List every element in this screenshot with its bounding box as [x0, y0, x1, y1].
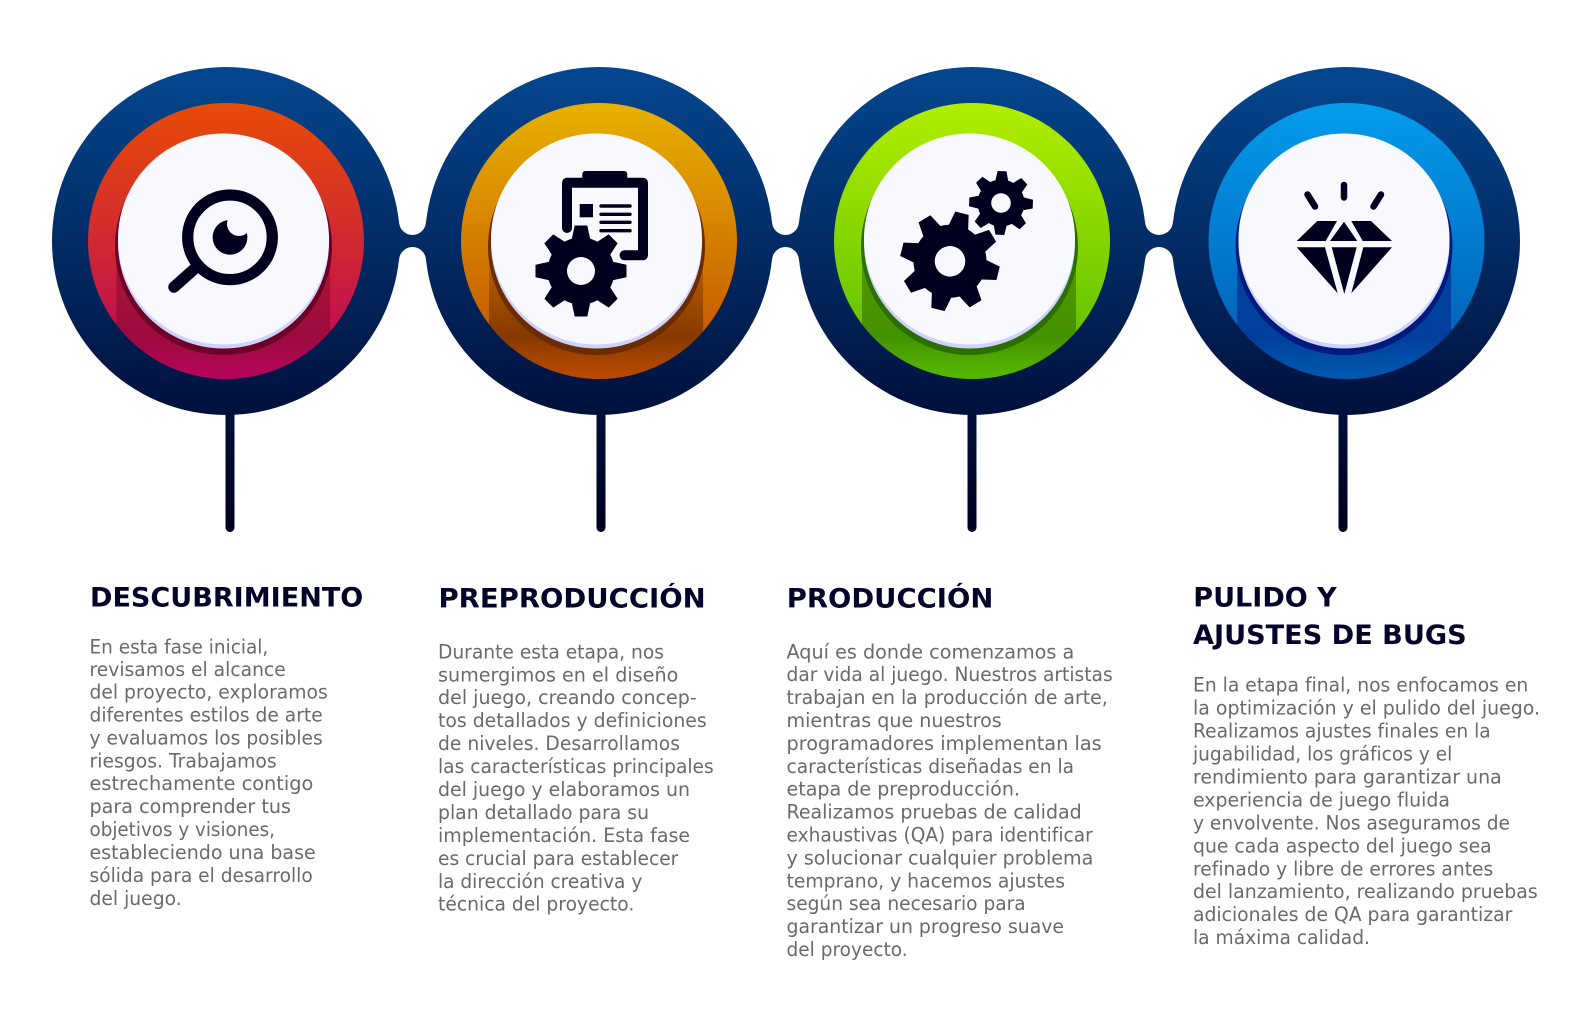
connector: circle 1 to circle 2 [395, 222, 430, 260]
icon: clipboard with gear [536, 171, 643, 316]
text column 1: descubrimiento [90, 583, 363, 910]
body text: produccion: dar vida al juego. Nuestros artistas [786, 663, 1113, 686]
body text: pulido y ajustes de bugs: del lanzamiento, realizando pruebas [1193, 880, 1538, 903]
stage 3 badge: produccion [798, 67, 1146, 532]
body text: pulido y ajustes de bugs: En la etapa final, nos enfocamos en [1193, 674, 1528, 697]
body text: produccion [786, 640, 1113, 961]
body text: produccion: exhaustivas (QA) para identificar [786, 824, 1094, 846]
icon: magnifier with eye [174, 195, 272, 287]
body text: pulido y ajustes de bugs: rendimiento para garantizar una [1193, 766, 1502, 788]
body text: descubrimiento: diferentes estilos de arte [90, 704, 323, 726]
text column 2: preproduccion [438, 583, 714, 916]
heading: produccion: PRODUCCIÓN [787, 583, 993, 615]
heading: pulido y ajustes de bugs: AJUSTES DE BUGS [1193, 620, 1467, 651]
body text: produccion: Realizamos pruebas de calidad [786, 801, 1082, 824]
body text: produccion: temprano, y hacemos ajustes [786, 869, 1065, 892]
icon: diamond with sparkle [1297, 185, 1392, 294]
body text: pulido y ajustes de bugs [1192, 674, 1540, 949]
connector: circle 2 to circle 3 [768, 222, 803, 260]
body text: produccion: programadores implementan las [786, 732, 1102, 755]
heading: preproduccion: PREPRODUCCIÓN [438, 583, 706, 615]
body text: descubrimiento: estableciendo una base [90, 841, 316, 864]
body text: descubrimiento: riesgos. Trabajamos [90, 749, 277, 772]
body text: preproduccion: tos detallados y definiciones [438, 709, 707, 732]
heading: pulido y ajustes de bugs [1193, 583, 1467, 651]
body text: preproduccion: plan detallado para su [438, 801, 649, 824]
body text: pulido y ajustes de bugs: la optimización y el pulido del juego. [1193, 697, 1540, 720]
body text: pulido y ajustes de bugs: la máxima calidad. [1193, 926, 1370, 949]
body text: preproduccion: las características principales [438, 755, 714, 778]
body text: produccion: mientras que nuestros [786, 709, 1002, 732]
body text: descubrimiento [90, 635, 328, 910]
text column 3: produccion [786, 583, 1113, 961]
stage 4 badge: pulido y ajustes [1172, 67, 1520, 532]
connector: circle 3 to circle 4 [1141, 221, 1177, 261]
body text: descubrimiento: del proyecto, exploramos [90, 681, 328, 704]
text column 4: pulido y ajustes de bugs [1192, 583, 1540, 949]
body text: pulido y ajustes de bugs: jugabilidad, los gráficos y el [1192, 742, 1452, 766]
body text: descubrimiento: En esta fase inicial, [90, 635, 268, 658]
body text: preproduccion: implementación. Esta fase [438, 824, 690, 847]
body text: descubrimiento: sólida para el desarrollo [90, 864, 313, 887]
body text: preproduccion: es crucial para establecer [438, 847, 679, 870]
body text: preproduccion: de niveles. Desarrollamos [438, 732, 680, 755]
body text: pulido y ajustes de bugs: y envolvente. Nos aseguramos de [1193, 811, 1510, 834]
body text: descubrimiento: objetivos y visiones, [90, 818, 275, 841]
body text: preproduccion: la dirección creativa y [438, 870, 643, 893]
body text: pulido y ajustes de bugs: experiencia de juego fluida [1193, 788, 1450, 811]
body text: pulido y ajustes de bugs: refinado y libre de errores antes [1193, 857, 1493, 880]
icon: two gears [890, 170, 1034, 321]
heading: descubrimiento: DESCUBRIMIENTO [90, 583, 363, 614]
body text: produccion: Aquí es donde comenzamos a [786, 640, 1074, 663]
body text: descubrimiento: del juego. [90, 887, 182, 910]
body text: descubrimiento: estrechamente contigo [90, 772, 313, 795]
stage 1 badge: descubrimiento [52, 67, 400, 532]
body text: produccion: garantizar un progreso suave [786, 915, 1064, 938]
body text: preproduccion [438, 640, 714, 916]
body text: pulido y ajustes de bugs: que cada aspecto del juego sea [1193, 834, 1492, 857]
heading: pulido y ajustes de bugs: PULIDO Y [1193, 583, 1337, 614]
stage 2 badge: preproduccion [425, 67, 773, 532]
body text: preproduccion: sumergimos en el diseño [438, 663, 678, 686]
body text: descubrimiento: para comprender tus [90, 795, 291, 818]
body text: produccion: etapa de preproducción. [786, 778, 1020, 801]
body text: pulido y ajustes de bugs: Realizamos ajustes finales en la [1193, 720, 1491, 743]
body text: produccion: características diseñadas en la [786, 755, 1074, 778]
body text: produccion: según sea necesario para [786, 892, 1026, 915]
body text: descubrimiento: y evaluamos los posibles [90, 726, 323, 749]
body text: produccion: trabajan en la producción de arte, [786, 686, 1108, 709]
body text: preproduccion: del juego y elaboramos un [438, 778, 690, 801]
body text: preproduccion: del juego, creando concep- [438, 686, 697, 709]
body text: preproduccion: técnica del proyecto. [438, 893, 634, 916]
body text: produccion: del proyecto. [786, 938, 908, 961]
body text: descubrimiento: revisamos el alcance [90, 658, 286, 681]
body text: preproduccion: Durante esta etapa, nos [438, 640, 664, 663]
body text: produccion: y solucionar cualquier problema [786, 846, 1093, 869]
body text: pulido y ajustes de bugs: adicionales de QA para garantizar [1193, 903, 1513, 926]
